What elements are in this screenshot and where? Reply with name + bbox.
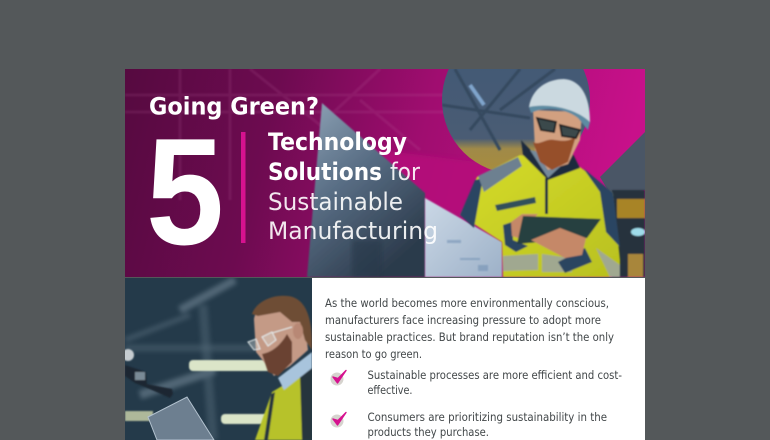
laptop (148, 397, 214, 440)
blurred beams (125, 280, 255, 440)
heading: Going Green?: Going Green? (149, 92, 319, 120)
left hand (511, 214, 538, 238)
monitor, light screen (425, 198, 502, 277)
paragraph line 3: sustainable practices. But brand reputation isn’t the only (325, 330, 614, 344)
headline line 3: Sustainable (268, 188, 403, 216)
big number 5: 5 (146, 107, 224, 277)
right hand (531, 228, 586, 258)
headline line 2 regular: for (390, 158, 420, 186)
jacket (460, 155, 620, 277)
dark jacket trim (264, 365, 312, 440)
robot arm (122, 349, 173, 398)
headline (268, 128, 438, 245)
pocket detail (495, 197, 536, 211)
white content panel (312, 278, 645, 440)
headline line 2 bold: Solutions (268, 158, 382, 186)
beard (262, 334, 292, 376)
lower magenta band (375, 148, 484, 213)
bullet 1 text (368, 368, 622, 397)
icon: check 2 (330, 412, 346, 428)
sleeve cuffs (503, 222, 592, 273)
circle with factory photo (442, 69, 590, 170)
hair (252, 296, 312, 350)
reflective stripes (503, 248, 620, 277)
neck and face (254, 308, 308, 376)
monitor lower highlights (447, 240, 488, 271)
monitor stand shadow (352, 240, 382, 277)
tablet (517, 216, 601, 244)
glasses (537, 118, 580, 138)
intro paragraph (325, 296, 614, 361)
yellow jacket (254, 377, 304, 440)
worker (460, 79, 620, 277)
glasses (248, 327, 292, 350)
jacket zip (545, 178, 548, 214)
beard (533, 136, 576, 170)
face (533, 110, 582, 170)
jacket grey shoulder (478, 157, 522, 192)
dark collar (521, 140, 580, 180)
headline line 4: Manufacturing (268, 217, 438, 245)
bullet 1 text: effective. (368, 383, 412, 397)
jacket dark sleeve left (460, 178, 483, 228)
magenta background (125, 69, 645, 277)
icon: check 1 (330, 370, 346, 386)
infographic page (125, 69, 645, 440)
lower left photo (122, 278, 312, 440)
neck and shirt (530, 150, 562, 178)
engineer (248, 296, 312, 440)
paragraph line 1: As the world becomes more environmentally conscious, (325, 296, 609, 310)
paragraph line 4: reason to go green. (325, 347, 422, 361)
jacket dark sleeve right (583, 168, 620, 247)
paragraph line 2: manufacturers face increasing pressure to adopt more (325, 313, 601, 327)
headline line 1: Technology (268, 128, 407, 156)
ceiling lights (125, 360, 283, 424)
factory ceiling trusses (125, 69, 450, 200)
ear (293, 323, 303, 339)
hard hat (529, 79, 590, 128)
warm factory lights (612, 190, 645, 277)
pink divider bar (241, 132, 246, 243)
grey-blue factory wedge (600, 132, 645, 197)
dark blue backdrop (125, 278, 312, 440)
bullet 2 text: products they purchase. (368, 425, 489, 439)
monitor, dark panel (307, 103, 425, 277)
bullet 2 text: Consumers are prioritizing sustainability in the (368, 410, 607, 424)
hat brim shadow (529, 106, 590, 130)
bullet 2 text (368, 410, 607, 439)
bullet 1 text: Sustainable processes are more efficient and cost- (368, 368, 622, 382)
hero banner (125, 69, 645, 277)
shirt collar (278, 352, 312, 390)
